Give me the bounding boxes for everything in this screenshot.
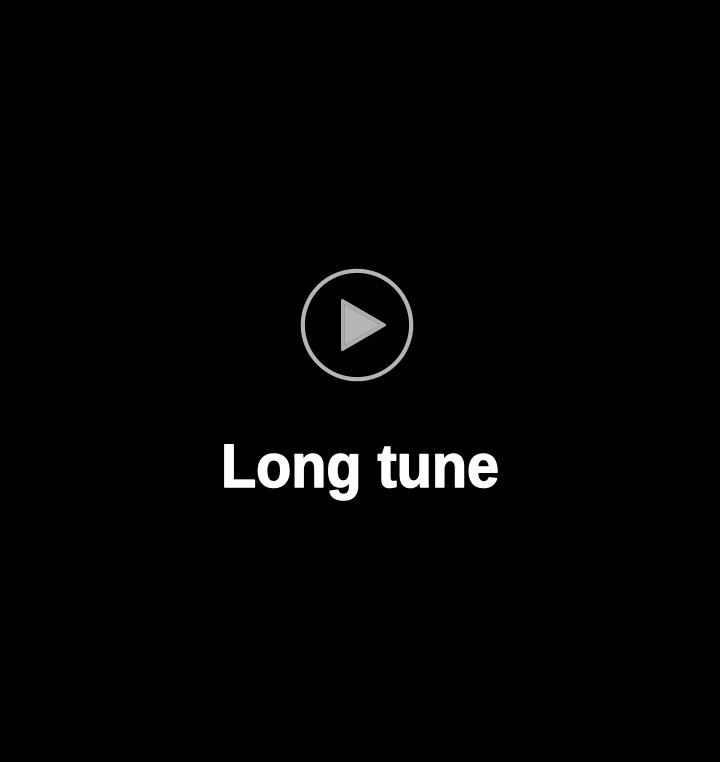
title: Long tune [221, 432, 499, 501]
play button ring [303, 271, 411, 379]
icon: play button [303, 271, 411, 379]
play triangle [342, 300, 384, 350]
